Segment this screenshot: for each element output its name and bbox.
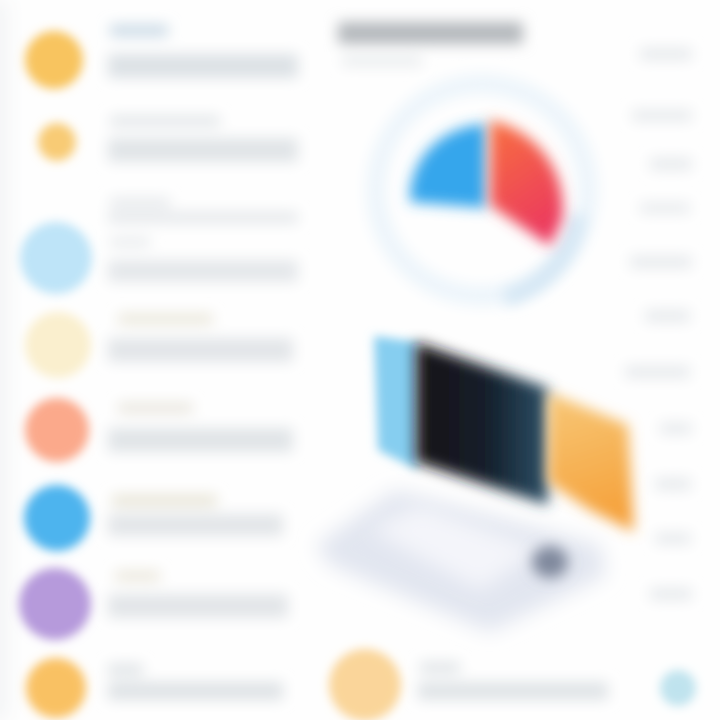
left column: list of items <box>19 25 298 718</box>
blue segment <box>410 124 486 208</box>
blue panel <box>374 336 418 470</box>
item 6 icon <box>24 485 90 551</box>
item 7 icon <box>19 568 91 640</box>
item 8 icon <box>26 658 86 718</box>
heading block <box>338 22 523 66</box>
bottom centre icon <box>329 649 401 720</box>
item 5 text <box>108 403 293 452</box>
bottom right icon <box>660 670 696 706</box>
left edge shade <box>0 0 8 720</box>
dark screen <box>416 342 548 505</box>
item 7 text <box>108 571 288 618</box>
item 3 text <box>108 198 298 282</box>
keyboard highlight <box>370 505 540 590</box>
item 3 icon <box>20 222 92 294</box>
chart outer ring <box>376 84 588 296</box>
trackpad detail <box>532 546 568 578</box>
item 5 icon <box>25 398 89 462</box>
item 4 text <box>108 314 293 362</box>
item 8 text <box>108 664 283 700</box>
item 4 icon <box>25 312 91 378</box>
item 1 icon <box>25 31 83 89</box>
laptop base <box>316 490 606 632</box>
red segment <box>490 120 563 246</box>
chart lower arc <box>505 215 578 298</box>
item 2 icon <box>38 123 76 161</box>
laptop illustration <box>316 336 634 632</box>
donut chart <box>376 84 588 298</box>
orange panel <box>548 392 634 532</box>
right column: labels <box>625 48 692 600</box>
bottom centre text <box>418 662 608 700</box>
item 2 text <box>108 116 298 162</box>
item 1 text <box>108 25 298 78</box>
item 6 text <box>108 495 283 536</box>
